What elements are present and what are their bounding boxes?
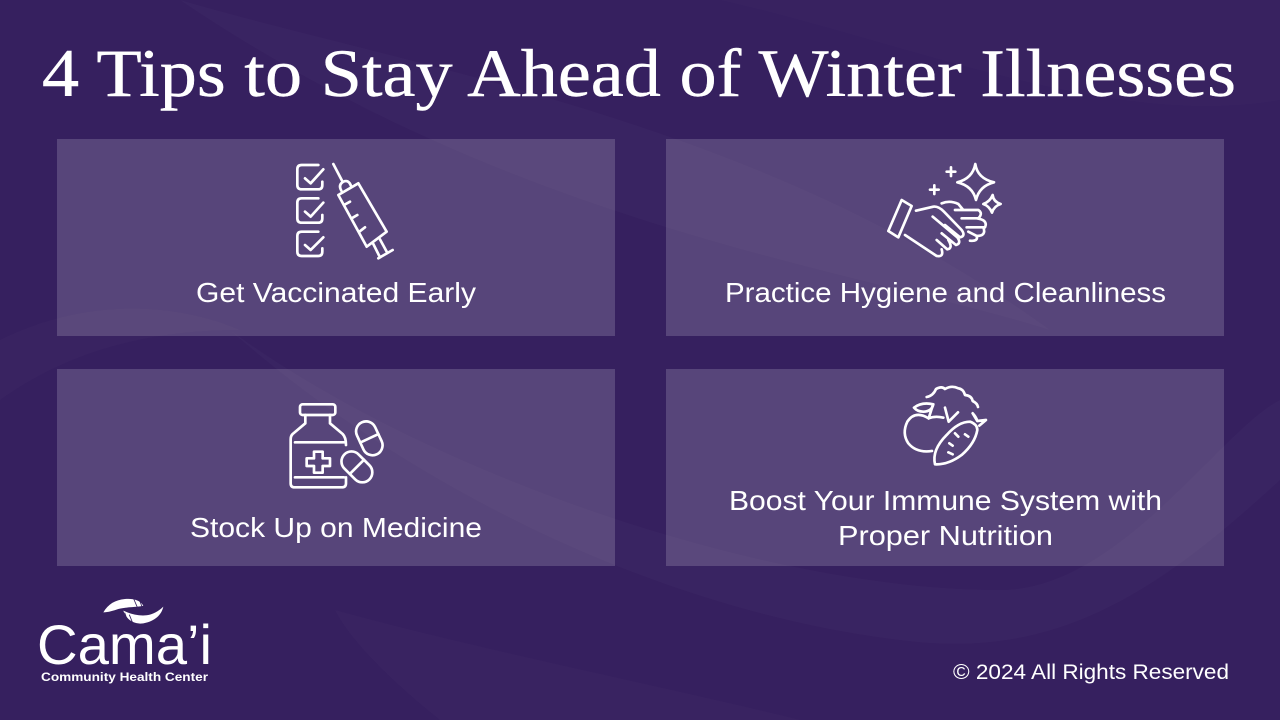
label: stock up on medicine: Stock Up on Medicine <box>190 512 482 543</box>
title: 4 Tips to Stay Ahead of Winter Illnesses <box>42 35 1236 111</box>
logo wordmark: Cama’i <box>37 613 212 676</box>
label: boost your immune system with proper nutrition: Boost Your Immune System with <box>729 485 1162 516</box>
panel: get vaccinated early <box>57 139 615 336</box>
label: practice hygiene and cleanliness: Practice Hygiene and Cleanliness <box>725 277 1166 308</box>
label: boost your immune system with proper nutrition: Proper Nutrition <box>838 520 1053 551</box>
icon: clean hands with sparkles <box>888 164 1001 256</box>
panel: stock up on medicine <box>57 369 615 566</box>
logo: Cama'i Community Health Center <box>37 598 212 684</box>
icon: medicine bottle and pills <box>291 404 386 487</box>
panel: practice hygiene and cleanliness <box>666 139 1224 336</box>
logo mark <box>103 598 163 625</box>
copyright: © 2024 All Rights Reserved <box>953 660 1229 684</box>
logo tagline: Community Health Center <box>41 672 209 684</box>
panel: boost your immune system <box>666 369 1224 566</box>
icon: apple, lettuce and carrot <box>905 387 986 464</box>
icon: checklist and syringe <box>297 164 393 258</box>
label: boost your immune system with proper nutrition <box>729 485 1162 551</box>
label: get vaccinated early: Get Vaccinated Early <box>196 277 476 308</box>
